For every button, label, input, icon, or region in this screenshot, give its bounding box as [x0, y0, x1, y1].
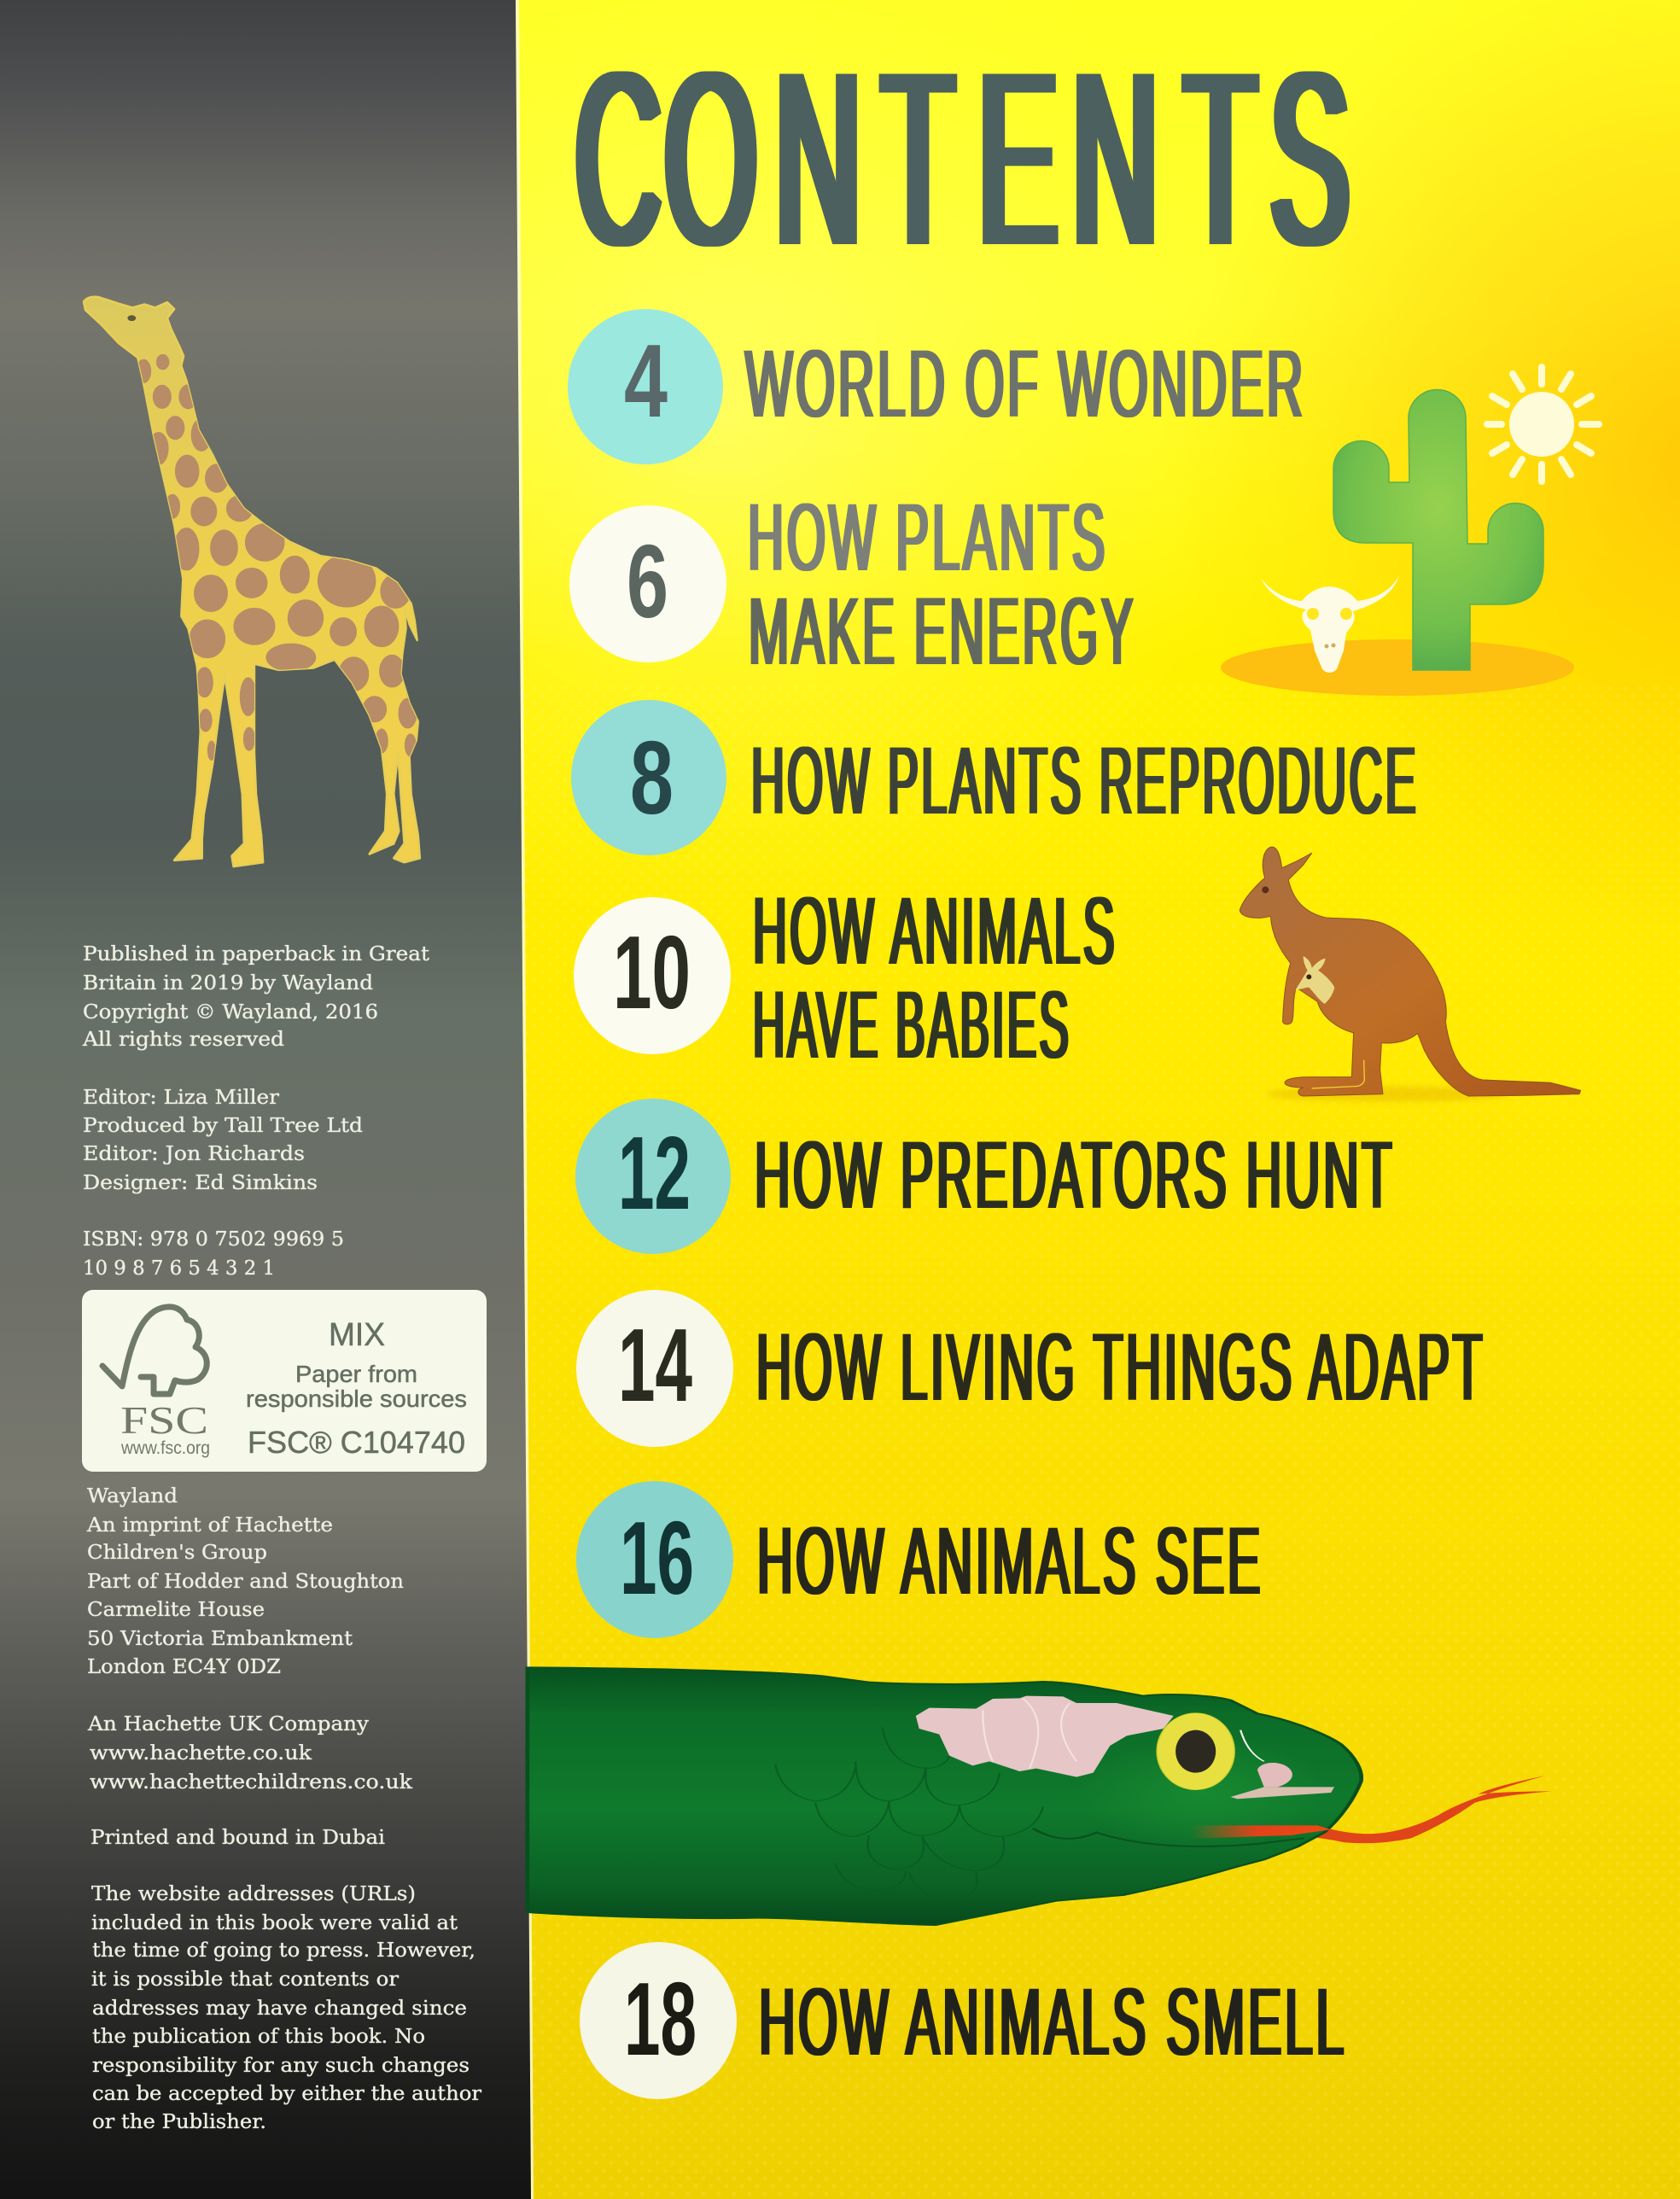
page number 18: 18 [624, 1961, 697, 2077]
snake eye [1157, 1713, 1234, 1790]
text block: website disclaimer: The website addresses (URLs) [91, 1883, 416, 1905]
text block: publisher address: Printed and bound in Dubai [90, 1827, 385, 1849]
page number 8 [571, 700, 726, 855]
snake olfactory organ [1230, 1730, 1334, 1799]
text block: publication and credits [82, 943, 430, 1280]
page number 8: 8 [630, 720, 674, 836]
row: page 4 [568, 309, 1306, 464]
page number 12 [575, 1099, 731, 1254]
kangaroo leg highlight [1312, 1060, 1364, 1088]
snake face highlight [1076, 1735, 1331, 1850]
text block: publication and credits: Britain in 2019 by Wayland [83, 972, 373, 995]
illustration: snake head cross-section [528, 1667, 1552, 1925]
heading: how animals have babies [753, 878, 1117, 1078]
icon: giraffe [84, 297, 420, 866]
row: page 6 [569, 484, 1136, 685]
title: CONTENTS [575, 21, 1350, 297]
text block: publication and credits: Designer: Ed Simkins [83, 1172, 318, 1194]
row: page 16 [576, 1481, 1263, 1638]
heading: how plants make energy: MAKE ENERGY [749, 578, 1136, 685]
page number 12: 12 [618, 1115, 691, 1231]
snake body [528, 1667, 1362, 1925]
desert ground shadow [1221, 639, 1574, 696]
text block: publication and credits: All rights reserved [82, 1029, 284, 1051]
joey [1295, 956, 1334, 1004]
text block: website disclaimer: it is possible that contents or [91, 1969, 399, 1991]
row: page 10 [574, 878, 1117, 1078]
text block: website disclaimer: the publication of this book. No [92, 2026, 425, 2048]
text block: publication and credits: Produced by Tall Tree Ltd [83, 1115, 363, 1137]
heading: how animals have babies: HAVE BABIES [753, 971, 1071, 1078]
heading: how plants make energy: HOW PLANTS [748, 484, 1108, 591]
snake scales [775, 1727, 1043, 1901]
text block: publication and credits: ISBN: 978 0 7502 9969 5 [83, 1228, 344, 1251]
text block: publication and credits: Editor: Jon Richards [83, 1143, 305, 1165]
label: paper from responsible sources [246, 1361, 467, 1412]
text block: publication and credits: 10 9 8 7 6 5 4 3 2 1 [83, 1257, 275, 1280]
page number 6 [569, 505, 726, 662]
label: paper from responsible sources: responsible sources [246, 1385, 467, 1412]
text block: website disclaimer: the time of going to press. However, [92, 1939, 475, 1962]
snake tongue base [1184, 1825, 1331, 1839]
row: page 8 [571, 700, 1419, 855]
FSC website: www.fsc.org [120, 1438, 210, 1458]
page number 18 [580, 1942, 737, 2099]
text block: website disclaimer: addresses may have changed since [92, 1998, 467, 2020]
panel: FSC certification label [82, 1290, 487, 1472]
text block: publisher address: Children's Group [87, 1542, 267, 1564]
text block: publication and credits: Copyright © Wayland, 2016 [83, 1001, 378, 1024]
text block: publisher address: Carmelite House [87, 1599, 265, 1621]
snake tongue [1217, 1776, 1552, 1843]
label: licence code: FSC® C104740 [248, 1425, 465, 1460]
text block: publisher address: London EC4Y 0DZ [87, 1656, 281, 1678]
text block: publisher address: www.hachette.co.uk [90, 1742, 312, 1764]
kangaroo body [1240, 847, 1581, 1096]
row: page 12 [575, 1099, 1395, 1254]
panel: dark imprint column [0, 0, 534, 2199]
illustration: desert scene [1221, 367, 1599, 696]
kangaroo eye [1262, 886, 1269, 893]
page number 14 [576, 1290, 733, 1447]
page number 6: 6 [627, 523, 668, 639]
row: page 18 [580, 1942, 1347, 2099]
text block: website disclaimer [91, 1883, 481, 2133]
text block: publisher address: An imprint of Hachette [86, 1514, 333, 1537]
heading: how plants make energy [748, 484, 1136, 685]
row: page 14 [576, 1290, 1485, 1447]
icon: sun [1487, 367, 1599, 481]
text block: website disclaimer: included in this book were valid at [91, 1912, 458, 1934]
page number 16 [576, 1481, 733, 1638]
icon: cattle skull [1261, 575, 1399, 673]
FSC wordmark: FSC [120, 1398, 208, 1442]
text block: publisher address: www.hachettechildrens.co.uk [90, 1771, 413, 1794]
text block: publication and credits: Published in paperback in Great [83, 943, 430, 965]
snake mouth line [1033, 1829, 1304, 1846]
icon: cactus [1333, 389, 1543, 670]
icon: FSC tick tree logo [102, 1307, 207, 1394]
page number 14: 14 [618, 1307, 692, 1423]
page number 10 [574, 897, 731, 1054]
kangaroo shadow [1266, 1087, 1511, 1101]
illustration: kangaroo with joey [1240, 847, 1581, 1101]
page: contents spread: HOW ANIMALS [753, 878, 1117, 984]
text block: publisher address: An Hachette UK Company [87, 1713, 369, 1735]
text block: publication and credits: Editor: Liza Miller [83, 1087, 279, 1109]
label: paper from responsible sources: Paper from [295, 1361, 417, 1387]
page number 10: 10 [613, 914, 691, 1030]
page number 4 [568, 309, 723, 464]
text block: publisher address: Part of Hodder and Stoughton [87, 1571, 404, 1593]
snake brain [916, 1696, 1174, 1777]
label: MIX: MIX [329, 1317, 385, 1353]
text block: publisher address [86, 1485, 413, 1849]
text block: website disclaimer: can be accepted by either the author [92, 2083, 481, 2105]
text block: publisher address: Wayland [87, 1485, 178, 1508]
page number 4: 4 [624, 323, 668, 439]
text block: website disclaimer: or the Publisher. [92, 2111, 266, 2133]
text block: publisher address: 50 Victoria Embankment [87, 1628, 353, 1650]
text block: website disclaimer: responsibility for any such changes [92, 2055, 470, 2077]
page number 16: 16 [620, 1500, 694, 1616]
